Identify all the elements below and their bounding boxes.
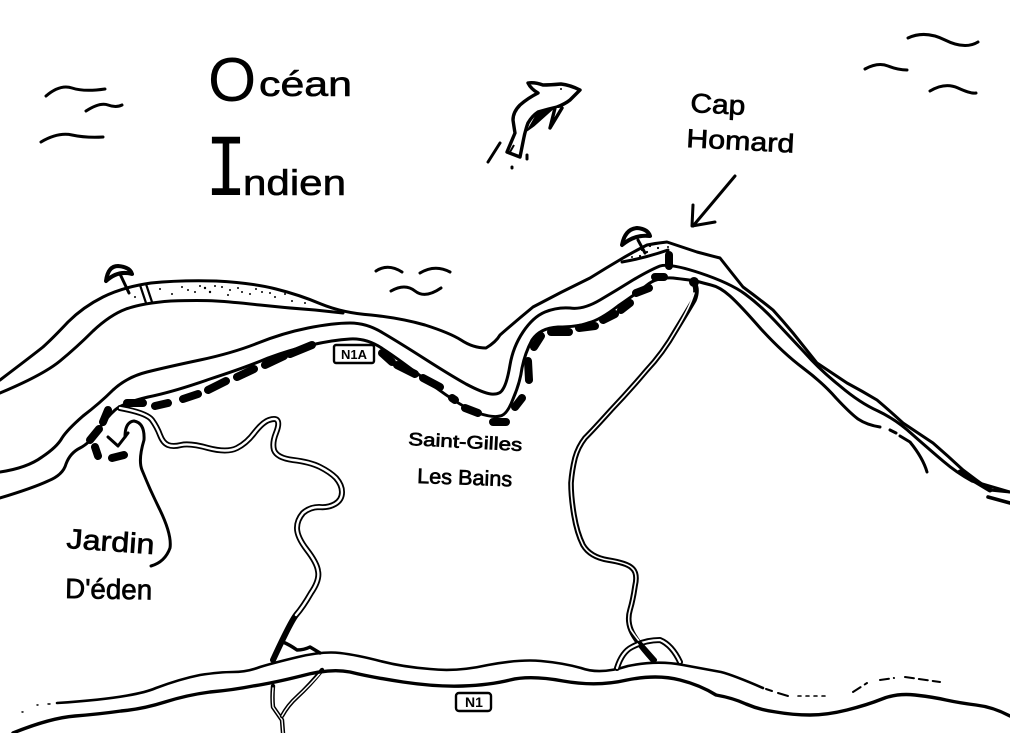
beach: stippled sand bbox=[134, 245, 669, 304]
title: Océan Indien: I bbox=[205, 123, 247, 222]
label: Jardin D'éden: Jardin bbox=[66, 523, 156, 560]
icon: waves centre bbox=[376, 267, 450, 294]
road: branch to Jardin d'Eden bbox=[120, 408, 342, 733]
label: Saint-Gilles Les Bains: Les Bains bbox=[417, 465, 513, 491]
icon: waves top left bbox=[41, 87, 122, 142]
label: Jardin D'éden: D'éden bbox=[65, 573, 152, 606]
title: Océan Indien: O bbox=[208, 46, 256, 115]
icon: parasol right bbox=[622, 228, 650, 253]
title: Océan Indien: ndien bbox=[243, 162, 346, 203]
road sign: N1: N1 bbox=[465, 694, 483, 710]
path: trail to Jardin d'Eden with arrow bbox=[108, 421, 170, 566]
title: Océan Indien: céan bbox=[259, 65, 352, 104]
arrow: to Cap Homard bbox=[692, 176, 735, 226]
icon: beach access left bbox=[140, 284, 152, 303]
road sign: N1 bbox=[456, 693, 491, 711]
road sign: N1A bbox=[334, 345, 374, 363]
label: Jardin D'éden bbox=[65, 523, 156, 606]
label: Saint-Gilles Les Bains bbox=[408, 429, 523, 491]
road: N1A coastal road bbox=[0, 265, 1010, 503]
label: Cap Homard bbox=[686, 88, 795, 159]
icon: parasol left bbox=[106, 266, 132, 293]
route: dashed walking path bbox=[90, 255, 699, 458]
title: Océan Indien bbox=[205, 46, 352, 222]
coastline bbox=[0, 242, 1010, 492]
label: Cap Homard: Cap bbox=[690, 88, 746, 121]
road: N1 highway bbox=[13, 652, 1010, 733]
label: Cap Homard: Homard bbox=[686, 123, 795, 159]
icon: waves top right bbox=[865, 34, 978, 93]
label: Saint-Gilles Les Bains: Saint-Gilles bbox=[408, 429, 523, 455]
icon: dolphin bbox=[488, 83, 580, 168]
road sign: N1A: N1A bbox=[341, 347, 368, 362]
road: branch from Cap Homard to N1 bbox=[571, 283, 696, 668]
